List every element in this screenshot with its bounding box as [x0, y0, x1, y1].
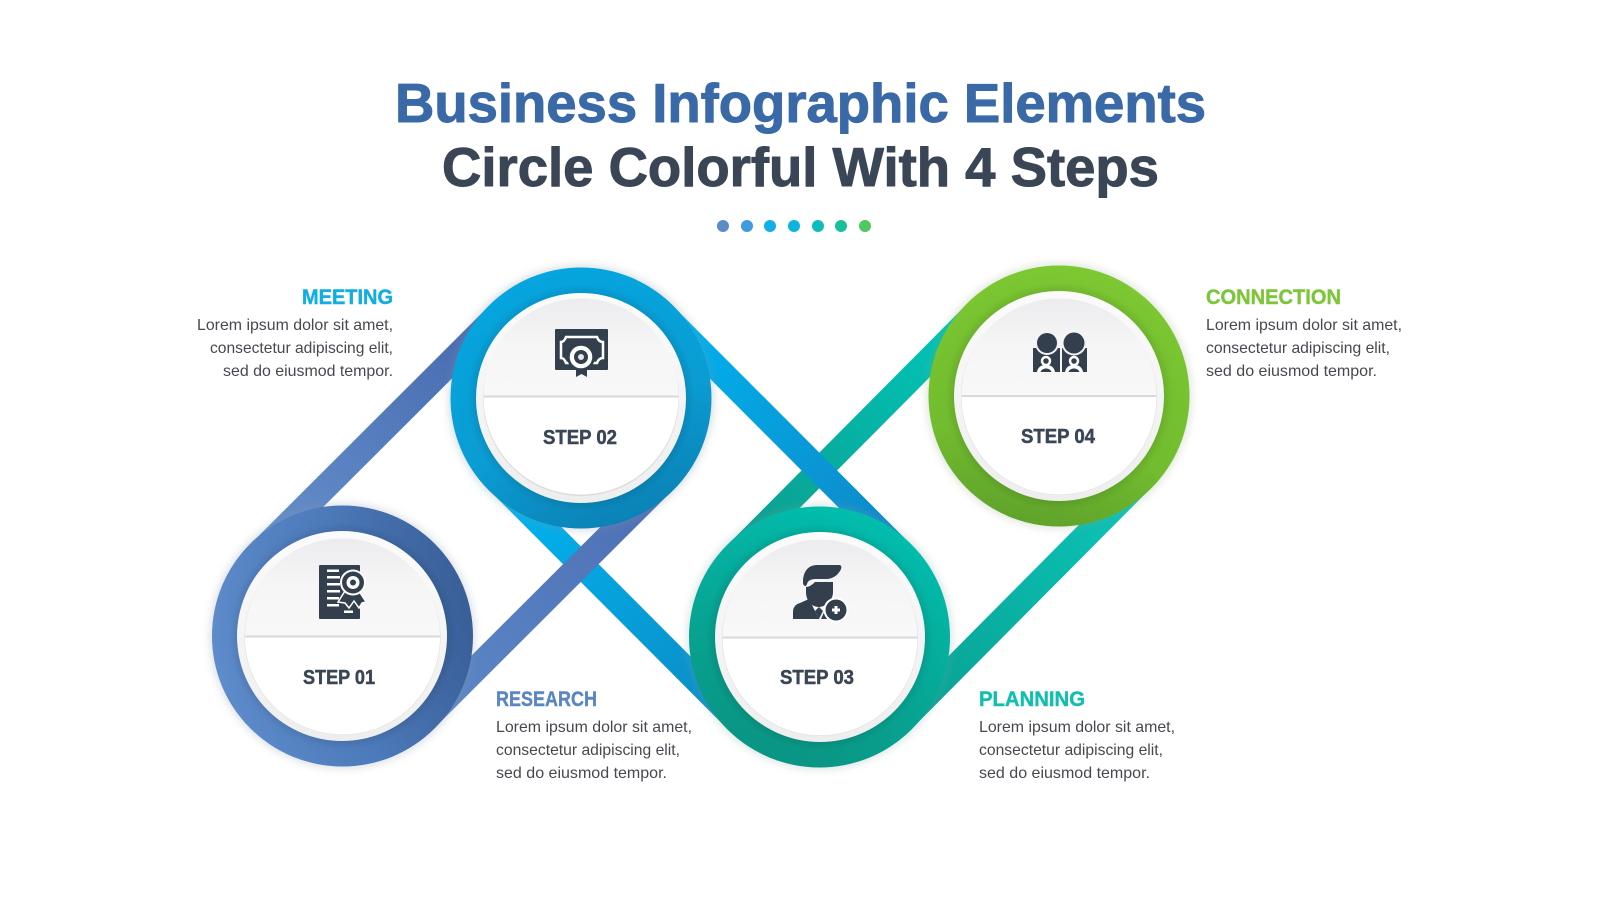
- icon: businessman with plus badge: [793, 565, 848, 622]
- step 03 circle: [686, 504, 952, 770]
- step 02 circle: [448, 265, 714, 531]
- text block: research: [496, 688, 692, 782]
- text block: connection: consectetur adipiscing elit,: [1206, 340, 1390, 357]
- text block: meeting: [197, 286, 393, 380]
- text block: research: Lorem ipsum dolor sit amet,: [496, 719, 692, 736]
- text block: planning: [979, 688, 1175, 782]
- title: [395, 72, 1206, 198]
- text block: research: sed do eiusmod tempor.: [496, 765, 667, 782]
- ribbon bands: [250, 304, 1151, 729]
- text block: planning: PLANNING: [979, 688, 1085, 711]
- text block: meeting: MEETING: [302, 286, 393, 309]
- text block: connection: [1206, 286, 1402, 380]
- label: step 04: STEP 04: [1021, 426, 1096, 448]
- label: step 01: STEP 01: [303, 667, 375, 689]
- icon: certificate document: [319, 565, 366, 619]
- dots row: [717, 220, 871, 232]
- step 01 circle: [210, 503, 476, 769]
- text block: planning: consectetur adipiscing elit,: [979, 742, 1163, 759]
- text block: planning: Lorem ipsum dolor sit amet,: [979, 719, 1175, 736]
- text block: research: consectetur adipiscing elit,: [496, 742, 680, 759]
- text block: connection: CONNECTION: [1206, 286, 1341, 309]
- icon: certificate frame: [555, 329, 608, 377]
- step 04 circle: [926, 263, 1192, 529]
- text block: connection: sed do eiusmod tempor.: [1206, 363, 1377, 380]
- text block: meeting: Lorem ipsum dolor sit amet,: [197, 317, 393, 334]
- label: step 03: STEP 03: [780, 667, 854, 689]
- text block: meeting: sed do eiusmod tempor.: [223, 363, 393, 380]
- text block: meeting: consectetur adipiscing elit,: [210, 340, 393, 357]
- text block: connection: Lorem ipsum dolor sit amet,: [1206, 317, 1402, 334]
- text block: planning: sed do eiusmod tempor.: [979, 765, 1150, 782]
- title: Circle Colorful With 4 Steps: [442, 136, 1159, 198]
- title: Business Infographic Elements: [395, 72, 1206, 134]
- label: step 02: STEP 02: [543, 427, 617, 449]
- icon: two portraits: [1033, 330, 1087, 372]
- text block: research: RESEARCH: [496, 688, 597, 711]
